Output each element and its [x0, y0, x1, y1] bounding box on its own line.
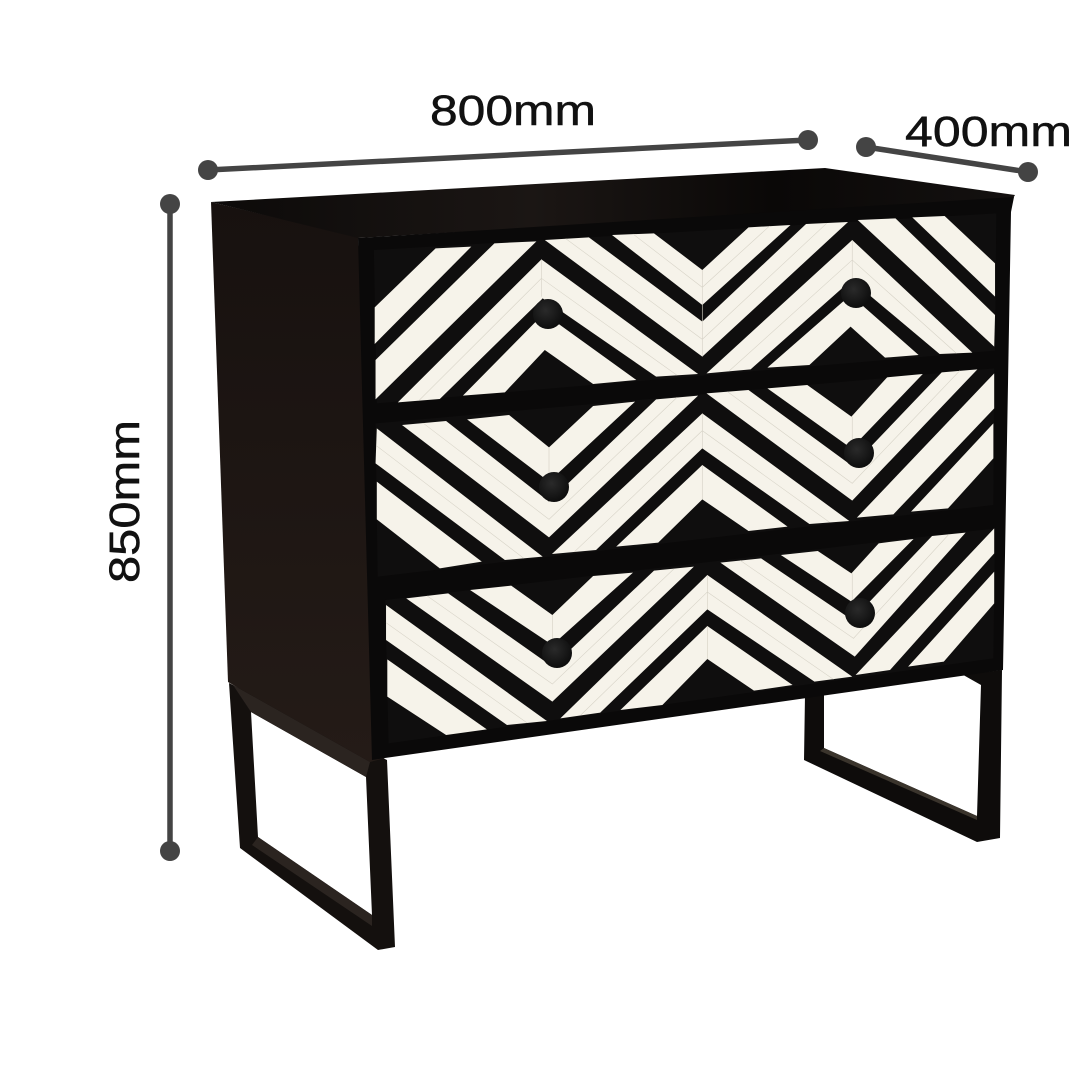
drawer 3	[385, 528, 995, 743]
height dimension line	[160, 194, 180, 861]
left metal leg frame	[229, 683, 395, 950]
depth label: 400mm	[905, 108, 1072, 156]
drawer 1	[374, 213, 996, 403]
right metal leg frame	[804, 670, 1002, 842]
height label: 850mm	[101, 420, 149, 583]
drawer 2	[376, 368, 994, 577]
chest top surface	[211, 168, 1015, 238]
width label: 800mm	[430, 87, 596, 135]
chest side panel	[211, 202, 385, 762]
chest front frame	[358, 197, 1014, 760]
drawer knobs	[533, 278, 875, 668]
width dimension line	[198, 130, 818, 180]
depth dimension line	[856, 137, 1038, 182]
